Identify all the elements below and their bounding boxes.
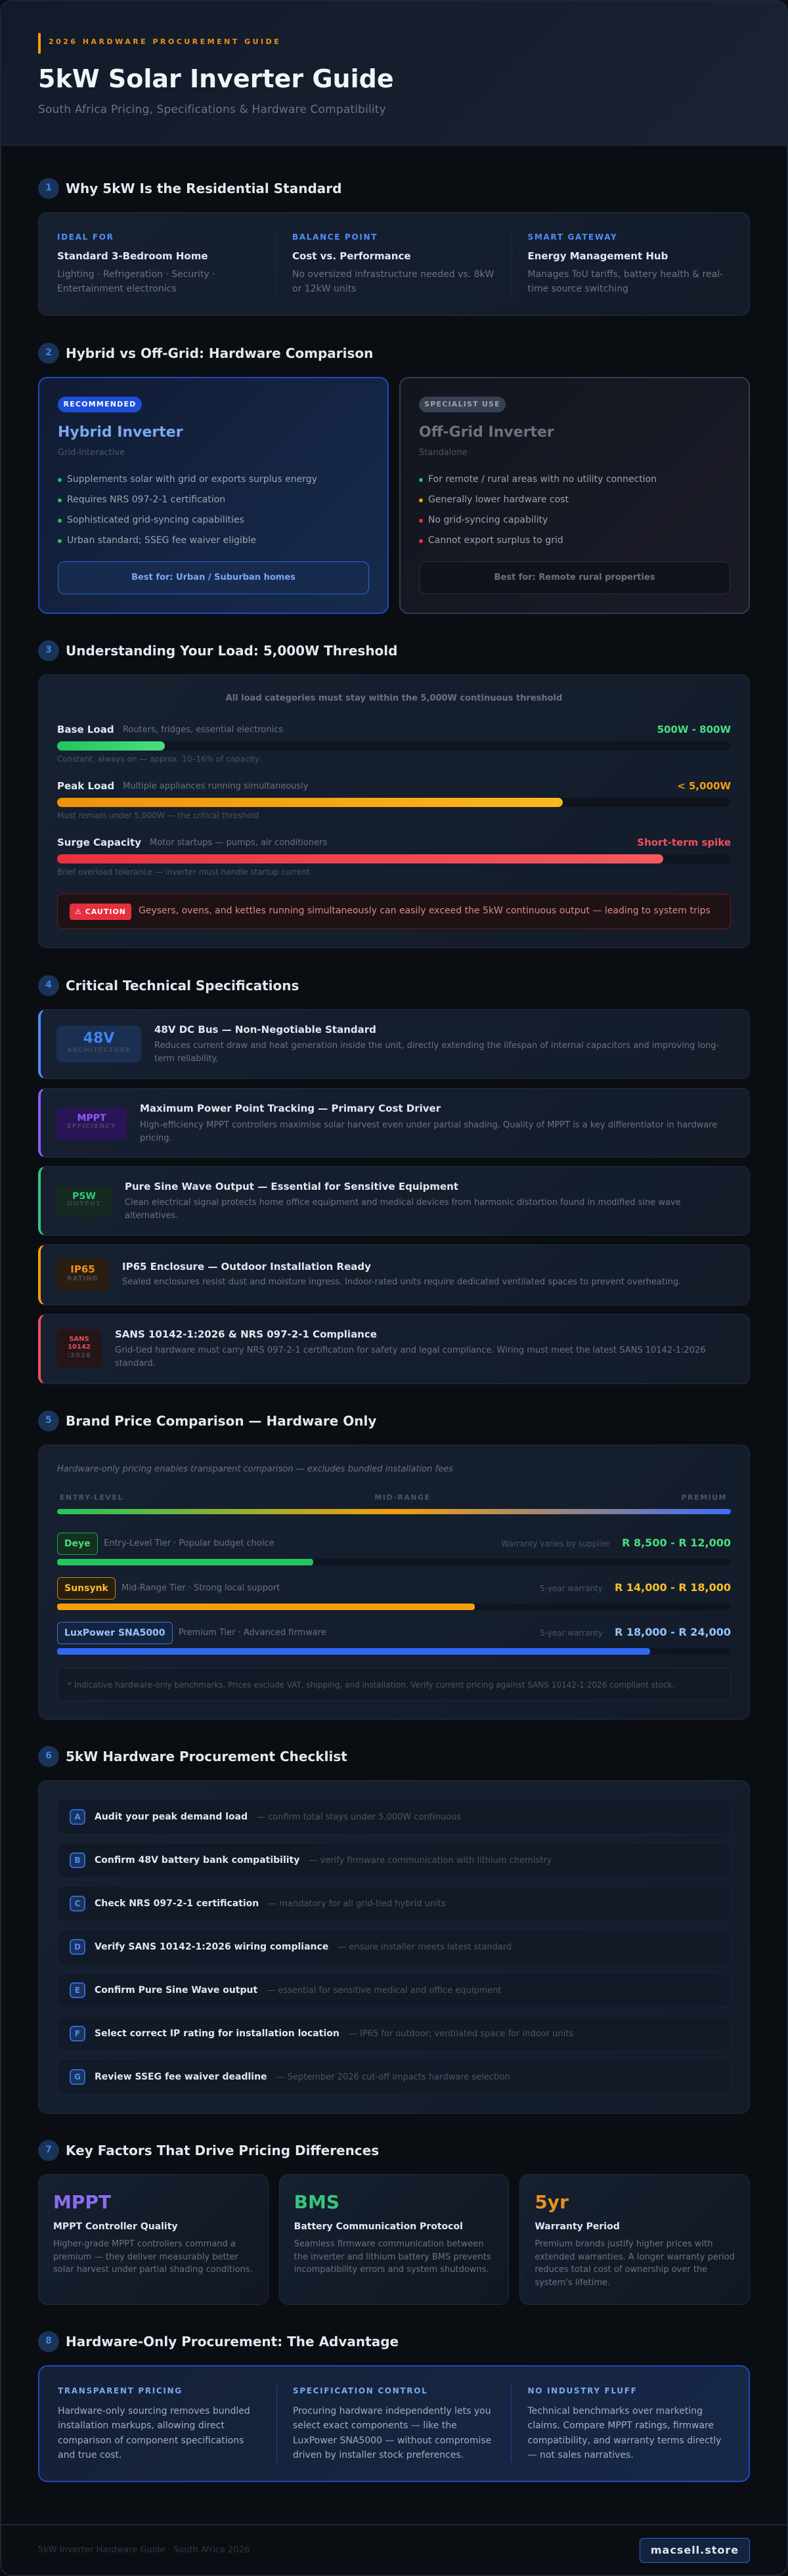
spec text: standard. <box>115 1359 156 1368</box>
checklist item C: Check NRS 097-2-1 certification — mandatory for all grid-tied hybrid units <box>95 1898 446 1909</box>
badge: specialist use <box>419 397 506 412</box>
checklist item A: A <box>74 1812 81 1822</box>
section 3 heading: Understanding Your Load: 5,000W Threshold <box>66 643 397 659</box>
brand: LuxPower <box>57 1622 731 1655</box>
column: smart gateway: SMART GATEWAY <box>528 232 617 242</box>
column: ideal for: IDEAL FOR <box>57 232 114 242</box>
load: surge <box>57 837 731 877</box>
checklist item G: Review SSEG fee waiver deadline — September 2026 cut-off impacts hardware selection <box>95 2072 510 2082</box>
section 3 heading <box>38 640 397 661</box>
brand: LuxPower: LuxPower SNA5000 <box>64 1628 165 1638</box>
load: base: 500W - 800W <box>657 724 731 735</box>
brand: Deye: Entry-Level Tier · Popular budget choice <box>104 1539 274 1548</box>
column: specification control: SPECIFICATION CONTROL <box>293 2386 427 2395</box>
spec: SANS <box>38 1314 750 1384</box>
caution badge <box>70 904 131 920</box>
checklist item D: Verify SANS 10142-1:2026 wiring compliance — ensure installer meets latest standard <box>95 1942 512 1952</box>
column: smart gateway <box>528 232 723 294</box>
section 1 heading: 1 <box>45 183 52 193</box>
feature list: Requires NRS 097-2-1 certification <box>67 494 225 505</box>
intro note: Hardware-only pricing enables transparent comparison — excludes bundled installation fees <box>57 1464 453 1474</box>
footer <box>0 2524 788 2576</box>
spec text: SANS 10142-1:2026 & NRS 097-2-1 Compliance <box>115 1328 377 1340</box>
badge: PSW: PSW <box>72 1191 96 1202</box>
column: ideal for: Lighting · Refrigeration · Security · <box>57 269 215 280</box>
checklist item E: Confirm Pure Sine Wave output — essential for sensitive medical and office equipment <box>95 1985 502 1996</box>
callout: caution <box>57 894 731 929</box>
badge: PSW: OUTPUT <box>67 1200 101 1208</box>
footnote <box>57 1668 731 1701</box>
card: BMS factor: Battery Communication Protocol <box>294 2221 463 2232</box>
card: BMS factor <box>279 2174 509 2305</box>
column: smart gateway: time source switching <box>528 284 628 294</box>
brand: Sunsynk: R 14,000 - R 18,000 <box>615 1581 731 1594</box>
section 8 heading: Hardware-Only Procurement: The Advantage <box>66 2334 399 2349</box>
card: warranty factor: extended warranties. A longer warranty period <box>535 2252 735 2261</box>
subtitle: South Africa Pricing, Specifications & Hardware Compatibility <box>38 103 386 116</box>
badge: IP65: RATING <box>67 1275 98 1282</box>
column: specification control: LuxPower SNA5000 — without compromise <box>293 2435 491 2446</box>
column: no industry fluff: — not sales narratives. <box>528 2450 634 2460</box>
load: surge: Brief overload tolerance — inverter must handle startup current <box>57 867 310 877</box>
column: transparent pricing: and true cost. <box>58 2450 121 2460</box>
brand: Deye <box>57 1533 731 1565</box>
load: base: Constant, always on — approx. 10–16% of capacity <box>57 754 259 764</box>
badge: SANS: :2026 <box>67 1352 91 1359</box>
badge: 48V: 48V <box>83 1030 114 1047</box>
brand: Sunsynk: Mid-Range Tier · Strong local support <box>121 1583 280 1593</box>
column: balance point: No oversized infrastructure needed vs. 8kW <box>292 269 494 280</box>
brand: Deye: Deye <box>64 1539 91 1549</box>
badge: PSW <box>56 1186 112 1217</box>
tier scale: PREMIUM <box>682 1493 727 1502</box>
badge: SANS: SANS <box>69 1336 89 1343</box>
checklist item D <box>57 1929 731 1965</box>
column: ideal for: Standard 3-Bedroom Home <box>57 250 208 262</box>
section 7 heading: 7 <box>45 2145 52 2155</box>
panel note: All load categories must stay within the 5,000W continuous threshold <box>226 693 562 703</box>
subheading: Grid-Interactive <box>58 448 125 458</box>
load: base <box>57 724 731 764</box>
panel: brand prices <box>38 1445 750 1720</box>
feature list <box>419 474 657 546</box>
card: warranty factor: 5yr <box>535 2191 569 2213</box>
brand: Deye: R 8,500 - R 12,000 <box>622 1537 731 1549</box>
section 8 heading: 8 <box>45 2336 52 2346</box>
column: no industry fluff: claims. Compare MPPT ratings, firmware <box>528 2420 714 2431</box>
heading: Hybrid Inverter <box>58 424 183 441</box>
feature list: Urban standard; SSEG fee waiver eligible <box>67 535 256 546</box>
feature list: Supplements solar with grid or exports surplus energy <box>67 474 317 485</box>
badge: MPPT: EFFICIENCY <box>67 1123 116 1129</box>
column: specification control <box>293 2386 491 2460</box>
checklist item B: B <box>74 1856 81 1865</box>
column: transparent pricing: Hardware-only sourcing removes bundled <box>58 2406 250 2416</box>
column: transparent pricing: comparison of component specifications <box>58 2435 244 2446</box>
checklist item E <box>57 1973 731 2008</box>
card: warranty factor: Premium brands justify higher prices with <box>535 2239 712 2249</box>
spec text: pricing. <box>140 1133 172 1143</box>
section 4 heading: Critical Technical Specifications <box>66 978 299 993</box>
card: MPPT factor: solar harvest under partial shading conditions. <box>53 2265 253 2275</box>
spec text: Sealed enclosures resist dust and moisture ingress. Indoor-rated units require dedicated ventilated spaces to prevent overheating. <box>122 1277 681 1287</box>
load: peak: < 5,000W <box>677 780 731 792</box>
column: ideal for: Entertainment electronics <box>57 284 177 294</box>
badge: recommended <box>58 397 142 412</box>
spec: PSW <box>38 1166 750 1236</box>
load: base: Routers, fridges, essential electronics <box>123 725 283 735</box>
spec text: Maximum Power Point Tracking — Primary Cost Driver <box>140 1102 441 1114</box>
badge: 48V <box>56 1026 141 1062</box>
spec: 48V <box>38 1009 750 1079</box>
spec text: term reliability. <box>154 1054 218 1064</box>
heading: Off-Grid Inverter <box>419 424 554 441</box>
brand: LuxPower: 5-year warranty <box>540 1628 603 1638</box>
card: warranty factor: system's lifetime. <box>535 2277 610 2288</box>
section 1 heading: Why 5kW Is the Residential Standard <box>66 181 341 196</box>
badge: specialist use: SPECIALIST USE <box>424 400 500 408</box>
card: warranty factor <box>519 2174 750 2305</box>
column: specification control: select exact components — like the <box>293 2420 457 2431</box>
column: balance point <box>292 232 494 294</box>
checklist item C <box>57 1886 731 1921</box>
brand: Deye: Warranty varies by supplier <box>502 1539 610 1548</box>
card: warranty factor: reduces total cost of ownership over the <box>535 2265 707 2275</box>
kicker accent bar <box>38 33 41 54</box>
column: balance point: BALANCE POINT <box>292 232 378 242</box>
spec text: alternatives. <box>125 1211 178 1221</box>
spec text: Clean electrical signal protects home office equipment and medical devices from harmonic distortion found in modified sine wave <box>125 1198 681 1208</box>
card: BMS factor: Seamless firmware communication between <box>294 2239 483 2249</box>
spec text: IP65 Enclosure — Outdoor Installation Ready <box>122 1261 371 1273</box>
spec text <box>122 1261 681 1287</box>
checklist item G: G <box>74 2072 81 2082</box>
section 5 heading <box>38 1410 376 1431</box>
badge: IP65 <box>56 1258 109 1291</box>
spec text: Pure Sine Wave Output — Essential for Sensitive Equipment <box>125 1181 458 1192</box>
load: surge: Motor startups — pumps, air conditioners <box>150 838 327 848</box>
column: ideal for <box>57 232 215 294</box>
checklist item A: Audit your peak demand load — confirm total stays under 5,000W continuous <box>95 1812 461 1822</box>
checklist item A <box>57 1799 731 1835</box>
section 1 heading <box>38 178 341 199</box>
section 8 heading <box>38 2331 399 2352</box>
card: BMS factor: incompatibility errors and system shutdowns. <box>294 2265 489 2275</box>
brand: LuxPower: Premium Tier · Advanced firmware <box>179 1628 326 1638</box>
load: peak <box>57 780 731 820</box>
checklist item B <box>57 1843 731 1878</box>
badge: MPPT: MPPT <box>77 1112 106 1123</box>
feature list: No grid-syncing capability <box>428 515 548 525</box>
panel: checklist <box>38 1780 750 2114</box>
section 4 heading: 4 <box>45 980 52 990</box>
badge: SANS <box>56 1329 102 1368</box>
section 6 heading: 5kW Hardware Procurement Checklist <box>66 1749 347 1764</box>
column: balance point: Cost vs. Performance <box>292 250 411 262</box>
load: base: Base Load <box>57 724 114 735</box>
checklist item F: Select correct IP rating for installation location — IP65 for outdoor; ventilated space for indoor units <box>95 2028 573 2039</box>
badge: recommended: RECOMMENDED <box>63 400 137 408</box>
card: MPPT factor: MPPT Controller Quality <box>53 2221 178 2232</box>
spec text: High-efficiency MPPT controllers maximise solar harvest even under partial shading. Quality of MPPT is a key differentiator in hardware <box>140 1120 717 1129</box>
spec: MPPT <box>38 1087 750 1157</box>
spec text <box>140 1102 717 1143</box>
caution text: Geysers, ovens, and kettles running simultaneously can easily exceed the 5kW continuous output — leading to system trips <box>139 906 711 916</box>
column: no industry fluff: Technical benchmarks over marketing <box>528 2406 703 2416</box>
load: peak: Peak Load <box>57 780 114 792</box>
best for callout: Best for: Urban / Suburban homes <box>131 573 296 582</box>
brand: LuxPower: R 18,000 - R 24,000 <box>615 1626 731 1638</box>
badge: IP65: IP65 <box>70 1263 95 1275</box>
section 2 heading: 2 <box>45 347 52 358</box>
feature list: Cannot export surplus to grid <box>428 535 563 546</box>
spec text: Reduces current draw and heat generation inside the unit, directly extending the lifespan of internal capacitors and improving long- <box>154 1041 719 1051</box>
card: MPPT factor: premium — they deliver measurably better <box>53 2252 238 2261</box>
tier scale: MID-RANGE <box>374 1493 431 1502</box>
card: MPPT factor: MPPT <box>53 2191 111 2213</box>
header banner <box>0 0 788 146</box>
tier scale: ENTRY-LEVEL <box>60 1493 123 1502</box>
section 7 heading: Key Factors That Drive Pricing Differences <box>66 2143 379 2158</box>
section 2 heading <box>38 343 373 364</box>
feature list: For remote / rural areas with no utility connection <box>428 474 657 485</box>
load: surge: Surge Capacity <box>57 837 141 848</box>
panel: load threshold <box>38 674 750 948</box>
column: specification control: Procuring hardware independently lets you <box>293 2406 491 2416</box>
section 6 heading: 6 <box>45 1751 52 1761</box>
load: peak: Multiple appliances running simultaneously <box>123 781 309 791</box>
brand: Sunsynk: 5-year warranty <box>540 1584 603 1593</box>
section 5 heading: Brand Price Comparison — Hardware Only <box>66 1413 376 1429</box>
column: transparent pricing: TRANSPARENT PRICING <box>58 2386 183 2395</box>
title: 5kW Solar Inverter Guide <box>38 64 394 93</box>
tier scale <box>57 1493 731 1514</box>
column: balance point: or 12kW units <box>292 284 356 294</box>
column: transparent pricing <box>58 2386 250 2460</box>
badge: 48V: ARCHITECTURE <box>67 1047 131 1054</box>
brand: Sunsynk: Sunsynk <box>64 1583 108 1594</box>
column: no industry fluff <box>527 2386 721 2460</box>
spec: IP65 <box>38 1244 750 1305</box>
feature list: Sophisticated grid-syncing capabilities <box>67 515 244 525</box>
card: MPPT factor: Higher-grade MPPT controllers command a <box>53 2239 236 2249</box>
checklist item F <box>57 2016 731 2051</box>
load: surge: Short-term spike <box>637 837 731 848</box>
card: warranty factor: Warranty Period <box>535 2221 620 2232</box>
feature list <box>58 474 317 546</box>
panel: hardware-only advantage <box>38 2365 750 2482</box>
column: no industry fluff: compatibility, and warranty terms directly <box>528 2435 721 2446</box>
panel: why 5kW <box>38 212 750 316</box>
section 6 heading <box>38 1746 347 1767</box>
best for callout <box>58 561 369 594</box>
best for callout <box>419 561 730 594</box>
footer note: 5kW Inverter Hardware Guide · South Africa 2026 <box>38 2545 250 2555</box>
section 2 heading: Hybrid vs Off-Grid: Hardware Comparison <box>66 345 373 361</box>
brand badge <box>640 2538 750 2563</box>
section 7 heading <box>38 2140 379 2161</box>
brand: Sunsynk <box>57 1577 731 1610</box>
section 3 heading: 3 <box>45 645 52 655</box>
column: transparent pricing: installation markups, allowing direct <box>58 2420 225 2431</box>
card: BMS factor: BMS <box>294 2191 339 2213</box>
subheading: Standalone <box>419 448 468 458</box>
kicker: 2026 HARDWARE PROCUREMENT GUIDE <box>49 37 281 46</box>
column: smart gateway: Manages ToU tariffs, battery health & real- <box>528 269 723 280</box>
panel: off-grid inverter <box>399 377 750 614</box>
panel: hybrid inverter <box>38 377 389 614</box>
footnote: * Indicative hardware-only benchmarks. Prices exclude VAT, shipping, and installation. Verify current pricing against SANS 10142-1:2026 compliant stock. <box>68 1680 674 1690</box>
checklist item E: E <box>75 1986 80 1995</box>
spec text: 48V DC Bus — Non-Negotiable Standard <box>154 1024 376 1036</box>
checklist item G <box>57 2059 731 2095</box>
spec text <box>154 1024 719 1064</box>
column: no industry fluff: NO INDUSTRY FLUFF <box>528 2386 638 2395</box>
brand badge: macsell.store <box>651 2544 739 2556</box>
section 4 heading <box>38 975 299 996</box>
badge: SANS: 10142 <box>68 1343 91 1351</box>
column: specification control: driven by installer stock preferences. <box>293 2450 464 2460</box>
checklist item D: D <box>74 1942 81 1952</box>
column: smart gateway: Energy Management Hub <box>528 250 668 262</box>
spec text <box>125 1181 681 1221</box>
spec text: Grid-tied hardware must carry NRS 097-2-1 certification for safety and legal compliance. Wiring must meet the latest SANS 10142-1:2026 <box>115 1345 706 1355</box>
checklist item B: Confirm 48V battery bank compatibility — verify firmware communication with lithium chemistry <box>95 1855 552 1866</box>
feature list: Generally lower hardware cost <box>428 494 569 505</box>
checklist item F: F <box>75 2029 80 2038</box>
section 5 heading: 5 <box>45 1415 52 1426</box>
checklist item C: C <box>75 1899 80 1908</box>
spec text <box>115 1328 706 1368</box>
load: peak: Must remain under 5,000W — the critical threshold <box>57 811 259 820</box>
badge: MPPT <box>56 1107 127 1140</box>
best for callout: Best for: Remote rural properties <box>494 573 655 582</box>
card: BMS factor: the inverter and lithium battery BMS prevents <box>294 2252 491 2261</box>
caution badge: ⚠ CAUTION <box>75 907 126 916</box>
card: MPPT factor <box>38 2174 269 2305</box>
